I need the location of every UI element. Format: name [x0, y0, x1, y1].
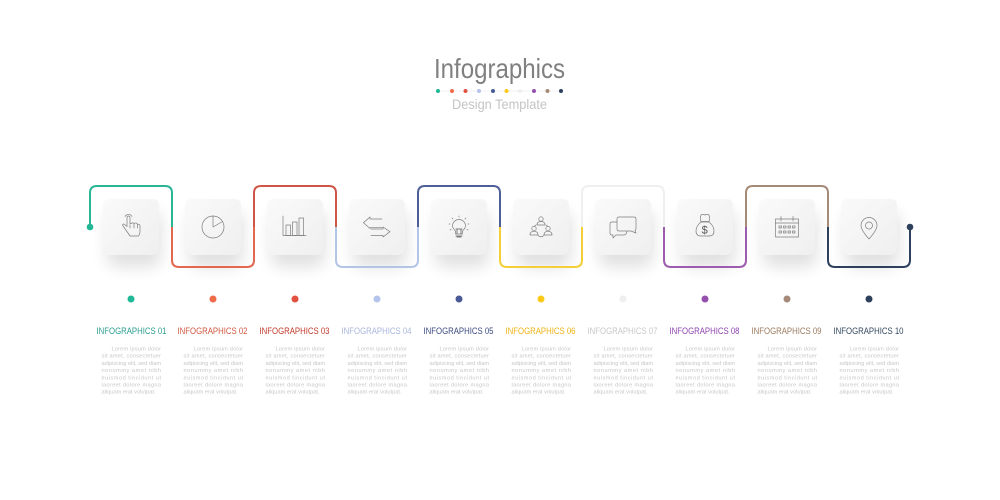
step heading 04: INFOGRAPHICS 04	[342, 326, 412, 336]
step text 05: nonummy amet nibh	[430, 368, 489, 374]
step heading 07: INFOGRAPHICS 07	[588, 326, 658, 336]
step text 05	[430, 346, 490, 396]
step text 01	[102, 346, 162, 396]
card 9: calendar icon	[759, 199, 817, 267]
step text 07	[594, 346, 654, 396]
step text 10: laoreet dolore magna	[840, 382, 900, 388]
step text 10	[840, 346, 900, 396]
icon: hand	[123, 214, 140, 236]
step text 01: Lorem ipsum dolor	[112, 346, 161, 352]
title: Infographics	[434, 53, 565, 84]
step text 01: aliquam erat volutpat.	[102, 390, 156, 396]
step text 08	[676, 346, 736, 396]
icon: bar chart	[283, 216, 306, 236]
step heading 02: INFOGRAPHICS 02	[178, 326, 248, 336]
step text 04: laoreet dolore magna	[348, 382, 408, 388]
step text 05: adipiscing elit, sed diam	[430, 361, 489, 367]
step text 04	[348, 346, 408, 396]
step text 03: Lorem ipsum dolor	[276, 346, 325, 352]
card 5: bulb icon	[431, 199, 489, 267]
step text 06: Lorem ipsum dolor	[522, 346, 571, 352]
step text 09: nonummy amet nibh	[758, 368, 817, 374]
step text 08: aliquam erat volutpat.	[676, 390, 730, 396]
step text 06: laoreet dolore magna	[512, 382, 572, 388]
step dots	[128, 296, 872, 302]
step text 08: euismod tincidunt ut	[676, 375, 735, 381]
step text 05: laoreet dolore magna	[430, 382, 490, 388]
step text 07: Lorem ipsum dolor	[604, 346, 653, 352]
step heading 08: INFOGRAPHICS 08	[670, 326, 740, 336]
step text 08: nonummy amet nibh	[676, 368, 735, 374]
card 6: people icon	[513, 199, 571, 267]
step text 02: nonummy amet nibh	[184, 368, 243, 374]
step text 10: aliquam erat volutpat.	[840, 390, 894, 396]
card 4: arrows icon	[349, 199, 407, 267]
step text 03: laoreet dolore magna	[266, 382, 326, 388]
step text 07: nonummy amet nibh	[594, 368, 653, 374]
card 7: speech icon	[595, 199, 653, 267]
step heading 09: INFOGRAPHICS 09	[752, 326, 822, 336]
step text 07: sit amet, consectetuer	[594, 354, 653, 360]
step text 02	[184, 346, 244, 396]
step text 04: nonummy amet nibh	[348, 368, 407, 374]
step text 07: laoreet dolore magna	[594, 382, 654, 388]
step heading 05: INFOGRAPHICS 05	[424, 326, 494, 336]
icon: speech bubbles	[610, 217, 636, 238]
step text 09: euismod tincidunt ut	[758, 375, 817, 381]
step text 02: laoreet dolore magna	[184, 382, 244, 388]
step text 05: Lorem ipsum dolor	[440, 346, 489, 352]
step text 04: sit amet, consectetuer	[348, 354, 407, 360]
card 1: hand icon	[103, 199, 161, 267]
card 2: pie icon	[185, 199, 243, 267]
step text 06: euismod tincidunt ut	[512, 375, 571, 381]
step text 03: sit amet, consectetuer	[266, 354, 325, 360]
step text 04: euismod tincidunt ut	[348, 375, 407, 381]
step text 02: euismod tincidunt ut	[184, 375, 243, 381]
step text 09: laoreet dolore magna	[758, 382, 818, 388]
connector line	[87, 186, 913, 267]
step text 06: adipiscing elit, sed diam	[512, 361, 571, 367]
icon: team	[530, 217, 552, 237]
step text 02: adipiscing elit, sed diam	[184, 361, 243, 367]
step text 08: adipiscing elit, sed diam	[676, 361, 735, 367]
step text 05: aliquam erat volutpat.	[430, 390, 484, 396]
icon: calendar	[776, 216, 798, 237]
card 3: bars icon	[267, 199, 325, 267]
step text 10: nonummy amet nibh	[840, 368, 899, 374]
icon: money bag: $	[702, 224, 708, 236]
step text 09: adipiscing elit, sed diam	[758, 361, 817, 367]
step text 04: aliquam erat volutpat.	[348, 390, 402, 396]
step text 06: nonummy amet nibh	[512, 368, 571, 374]
step text 05: euismod tincidunt ut	[430, 375, 489, 381]
step text 08: Lorem ipsum dolor	[686, 346, 735, 352]
step text 07: aliquam erat volutpat.	[594, 390, 648, 396]
step text 06	[512, 346, 572, 396]
step text 03: adipiscing elit, sed diam	[266, 361, 325, 367]
step text 03: euismod tincidunt ut	[266, 375, 325, 381]
step text 03	[266, 346, 326, 396]
step text 03: nonummy amet nibh	[266, 368, 325, 374]
step text 08: sit amet, consectetuer	[676, 354, 735, 360]
step text 08: laoreet dolore magna	[676, 382, 736, 388]
step text 04: adipiscing elit, sed diam	[348, 361, 407, 367]
title dots	[436, 89, 563, 93]
card 10: pin icon	[841, 199, 899, 267]
step text 02: aliquam erat volutpat.	[184, 390, 238, 396]
step text 09: Lorem ipsum dolor	[768, 346, 817, 352]
step text 01: nonummy amet nibh	[102, 368, 161, 374]
step text 03: aliquam erat volutpat.	[266, 390, 320, 396]
icon: swap arrows	[364, 217, 390, 237]
step text 02: Lorem ipsum dolor	[194, 346, 243, 352]
step text 09: sit amet, consectetuer	[758, 354, 817, 360]
step heading 10: INFOGRAPHICS 10	[834, 326, 904, 336]
step text 10: adipiscing elit, sed diam	[840, 361, 899, 367]
step text 10: euismod tincidunt ut	[840, 375, 899, 381]
subtitle: Design Template	[452, 96, 547, 112]
step heading 03: INFOGRAPHICS 03	[260, 326, 330, 336]
step text 01: laoreet dolore magna	[102, 382, 162, 388]
step text 05: sit amet, consectetuer	[430, 354, 489, 360]
step text 07: euismod tincidunt ut	[594, 375, 653, 381]
step text 01: sit amet, consectetuer	[102, 354, 161, 360]
step text 10: Lorem ipsum dolor	[850, 346, 899, 352]
icon: pie chart	[202, 216, 224, 238]
step text 01: adipiscing elit, sed diam	[102, 361, 161, 367]
icon: light bulb	[449, 216, 469, 237]
step text 09: aliquam erat volutpat.	[758, 390, 812, 396]
step text 02: sit amet, consectetuer	[184, 354, 243, 360]
step text 10: sit amet, consectetuer	[840, 354, 899, 360]
step text 06: sit amet, consectetuer	[512, 354, 571, 360]
step heading 01: INFOGRAPHICS 01	[96, 326, 166, 336]
step text 09	[758, 346, 818, 396]
step text 01: euismod tincidunt ut	[102, 375, 161, 381]
card 8: money bag icon	[677, 199, 735, 267]
icon: map pin	[861, 218, 877, 239]
step text 06: aliquam erat volutpat.	[512, 390, 566, 396]
step text 07: adipiscing elit, sed diam	[594, 361, 653, 367]
step heading 06: INFOGRAPHICS 06	[506, 326, 576, 336]
step text 04: Lorem ipsum dolor	[358, 346, 407, 352]
